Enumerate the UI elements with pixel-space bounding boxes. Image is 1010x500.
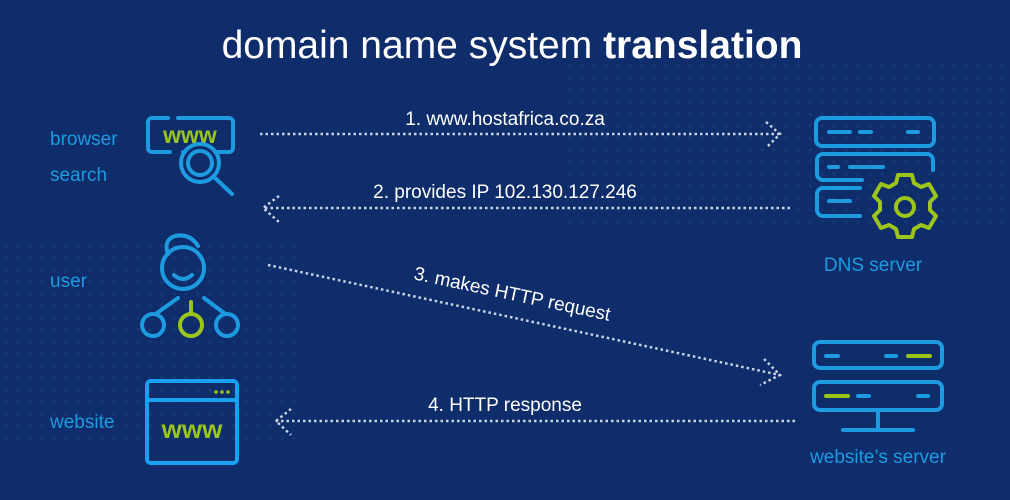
icon: website (147, 381, 237, 463)
label: browser search: search (50, 165, 107, 186)
label: user: user (50, 271, 88, 292)
arrow 4 (275, 409, 795, 435)
label: browser search: browser (50, 129, 118, 150)
label: website: website (49, 412, 114, 433)
arrow 1 (260, 122, 780, 148)
icon: browser search (148, 118, 233, 194)
icon: DNS server (816, 118, 936, 237)
arrow 2 (262, 196, 790, 222)
title: domain name system translation (222, 24, 802, 67)
text: step 3: 3. makes HTTP request (412, 264, 613, 326)
label: website's server: website’s server (809, 447, 947, 468)
icon: website: www (161, 414, 223, 444)
text: step 1: 1. www.hostafrica.co.za (405, 109, 605, 130)
icon: browser search: www (162, 122, 217, 148)
text: step 4: 4. HTTP response (428, 395, 582, 416)
arrow 3 (268, 265, 780, 385)
icon: user (142, 235, 238, 336)
icon: website's server (814, 342, 942, 430)
text: step 2: 2. provides IP 102.130.127.246 (373, 182, 637, 203)
label: DNS server: DNS server (824, 255, 923, 276)
